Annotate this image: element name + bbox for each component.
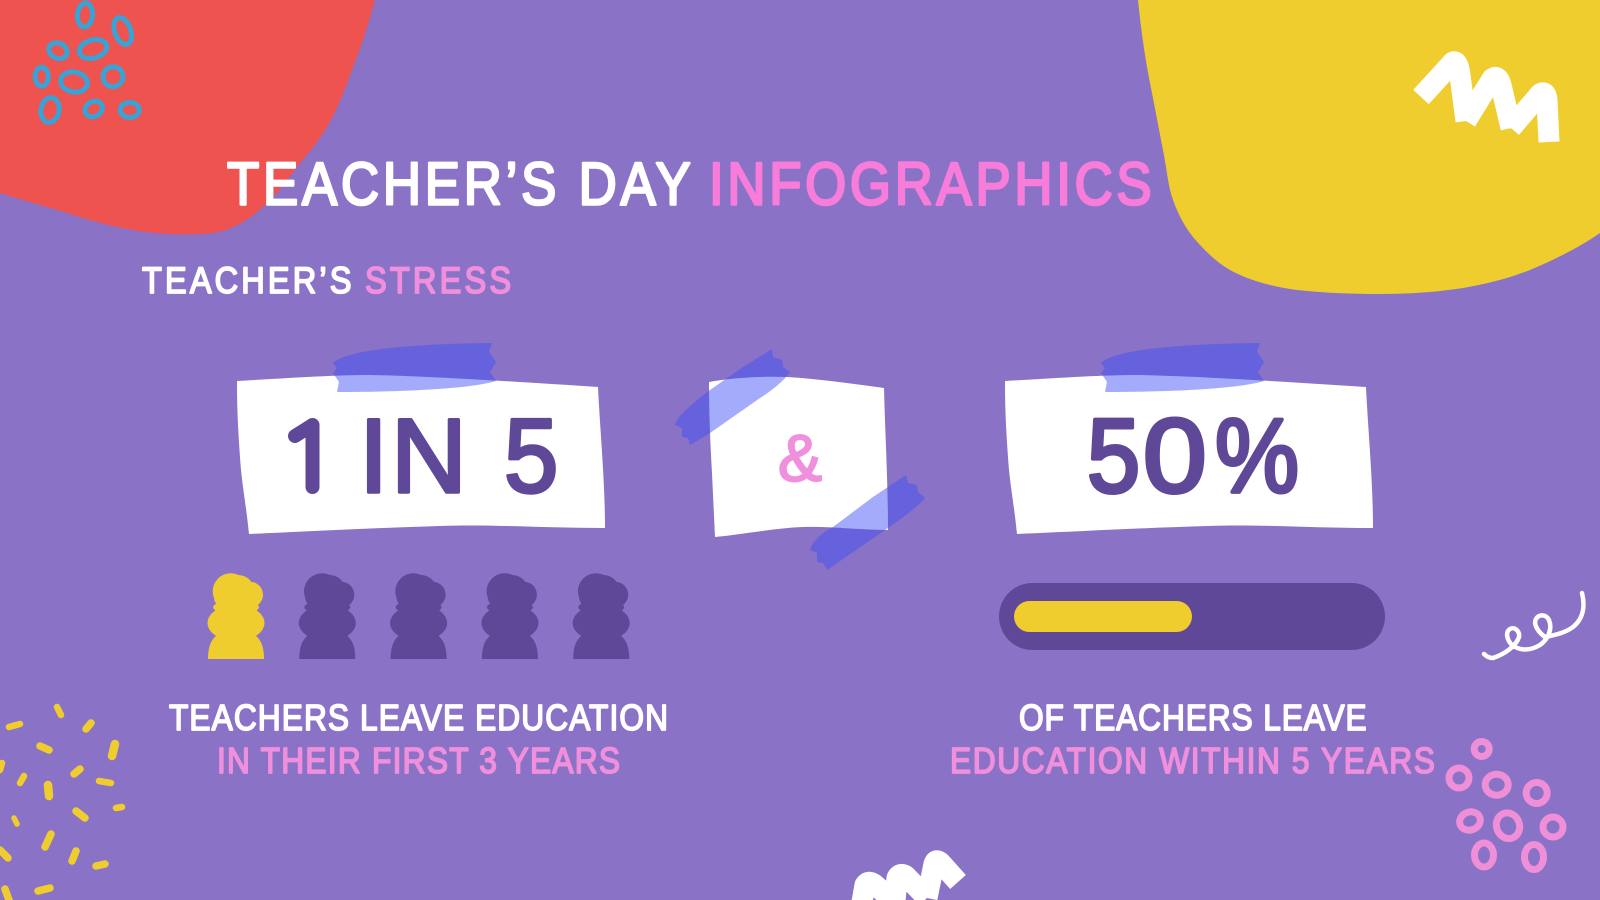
heading: teacher's stress: STRESS <box>365 260 511 301</box>
heading: teacher's stress: TEACHER’S <box>142 260 351 301</box>
number: 50 percent: 0 <box>1143 398 1207 515</box>
number: 50 percent <box>1087 398 1299 515</box>
panel: 1 in 5 <box>237 343 605 534</box>
number: 1 in 5: 1 <box>281 398 339 515</box>
text: right caption: EDUCATION WITHIN 5 YEARS <box>950 741 1435 781</box>
number: 50 percent: % <box>1215 398 1299 515</box>
icon: white curl <box>1484 593 1583 658</box>
ampersand: & <box>778 421 822 495</box>
text: left caption <box>169 698 668 781</box>
icon: purple person 2 <box>299 573 356 659</box>
number: 1 in 5: 5 <box>504 398 558 515</box>
icon: blue rings <box>35 2 139 124</box>
heading: teacher's stress <box>142 260 511 301</box>
number: 50 percent: 5 <box>1087 398 1140 515</box>
icon: purple person 3 <box>390 573 447 659</box>
icon: purple person 5 <box>573 573 630 659</box>
number: 1 in 5: I <box>359 398 388 515</box>
panel: 50 percent <box>1005 343 1373 534</box>
icon: pink rings <box>1449 742 1563 870</box>
title <box>227 150 1152 217</box>
text: left caption: TEACHERS LEAVE EDUCATION <box>169 698 668 738</box>
tape: 50 percent <box>1101 343 1264 392</box>
icon row: five teachers <box>208 573 630 659</box>
card: 1 in 5 <box>237 375 605 534</box>
icon: white scribble top right <box>1421 62 1549 142</box>
text: right caption: OF TEACHERS LEAVE <box>1019 698 1367 738</box>
red blob <box>0 0 375 234</box>
text: left caption: IN THEIR FIRST 3 YEARS <box>217 741 620 781</box>
tape: 1 in 5 <box>333 343 496 392</box>
progress bar <box>999 583 1385 650</box>
card: ampersand <box>709 377 888 537</box>
icon: yellow sprinkles <box>0 707 122 900</box>
text: right caption <box>950 698 1435 781</box>
card: 50 percent <box>1005 375 1373 534</box>
icon: purple person 4 <box>481 573 538 659</box>
number: 1 in 5 <box>288 418 556 495</box>
panel: ampersand <box>675 349 925 570</box>
title: INFOGRAPHICS <box>709 150 1152 217</box>
icon: white scribble bottom <box>862 861 958 900</box>
icon: yellow person <box>208 573 264 659</box>
tape: lower right <box>810 475 925 570</box>
number: 1 in 5: N <box>391 398 467 515</box>
yellow blob <box>1138 0 1600 294</box>
tape: upper left <box>675 349 790 445</box>
title: TEACHER’S DAY <box>227 150 691 217</box>
